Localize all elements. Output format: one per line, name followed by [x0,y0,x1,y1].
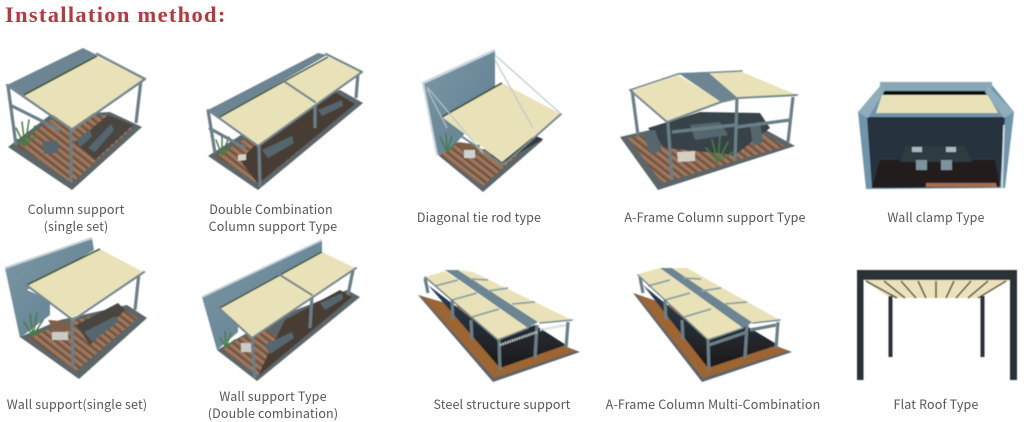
label: column support: Column support [28,199,125,218]
panel: flat roof type [857,270,1017,413]
label: wall support single: Wall support(single set) [7,394,147,413]
label: double combination: Double Combination [209,199,333,218]
label: wall support double: (Double combination) [208,403,338,422]
panel: steel structure support [418,270,580,413]
panel: A-frame column support [620,71,806,226]
panel: A-frame column multi-combination [606,268,820,413]
panel: column support single set [7,48,145,235]
icon: double wall support pergola [202,240,360,381]
label: diagonal tie rod: Diagonal tie rod type [417,207,541,226]
title: Installation method: [5,2,227,27]
icon: A-frame pergola [620,71,797,190]
label: steel structure: Steel structure support [433,394,571,413]
label: A-frame multi-combination: A-Frame Column Multi-Combination [606,394,820,413]
label: wall support double: Wall support Type [219,386,327,405]
panel: wall support single set [5,238,147,413]
label: column support: (single set) [44,216,108,235]
icon: A-frame multi-bay [633,268,792,382]
panel: wall support double combination [202,240,360,422]
label: column support [28,199,125,235]
icon: wall clamp enclosure [858,82,1014,189]
panel: diagonal tie rod type [417,50,561,226]
icon: wall support pergola [5,238,147,379]
label: wall support double [208,386,338,422]
icon: steel structure multi-bay [418,270,580,382]
panel: double combination column support [208,53,363,235]
label: double combination [209,199,337,235]
label: wall clamp: Wall clamp Type [887,207,985,226]
icon: column support pergola [7,48,145,190]
icon: double pergola [208,53,363,190]
label: double combination: Column support Type [209,216,337,235]
panel: wall clamp type [858,82,1014,226]
icon: flat roof pergola [857,270,1017,380]
icon: diagonal tie rod awning [422,50,561,192]
label: flat roof: Flat Roof Type [894,394,978,413]
label: A-frame column support: A-Frame Column support Type [624,207,806,226]
